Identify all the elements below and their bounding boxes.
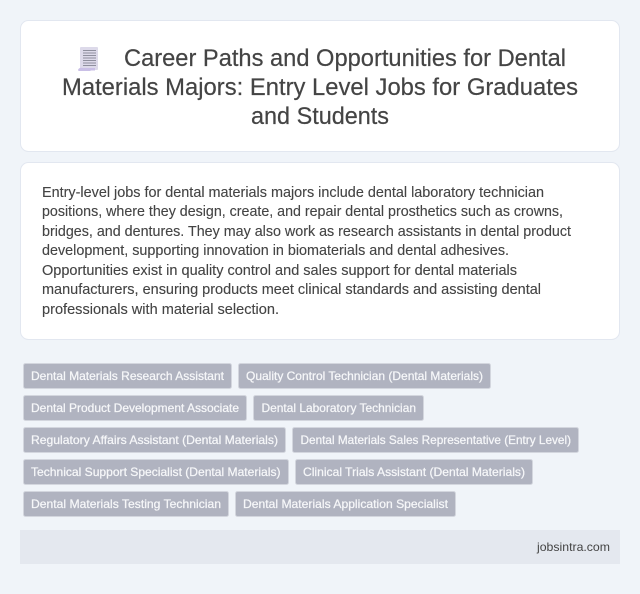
tag: Dental Materials Research Assistant	[24, 364, 232, 388]
tag: Dental Laboratory Technician	[254, 396, 424, 420]
tag: Dental Materials Research Assistant: Dental Materials Research Assistant	[31, 369, 225, 383]
tag: Dental Materials Sales Representative	[292, 428, 578, 452]
tag: Quality Control Technician	[238, 364, 490, 388]
tag: Dental Materials Sales Representative: Dental Materials Sales Representative (Entry Level)	[300, 433, 571, 447]
tag: Technical Support Specialist: Technical Support Specialist (Dental Materials)	[31, 465, 281, 479]
tag: Regulatory Affairs Assistant	[24, 428, 286, 452]
icon: document scroll	[78, 47, 98, 71]
panel: description card	[20, 162, 620, 340]
footer: jobsintra.com	[536, 540, 610, 554]
tag: Clinical Trials Assistant	[296, 460, 532, 484]
text block: description: professionals with material selection.	[42, 302, 279, 318]
tag: Quality Control Technician: Quality Control Technician (Dental Materials)	[246, 369, 483, 383]
tag: Dental Materials Application Specialist: Dental Materials Application Specialist	[243, 497, 449, 511]
text block: description: Opportunities exist in quality control and sales support for dental materials	[42, 263, 517, 279]
tag: Dental Laboratory Technician: Dental Laboratory Technician	[262, 401, 416, 415]
job tags	[24, 364, 578, 516]
text block: description: bridges, and dentures. They may also work as research assistants in dental product	[42, 224, 571, 240]
tag: Dental Product Development Associate: Dental Product Development Associate	[31, 401, 239, 415]
text block: description: development, supporting innovation in biomaterials and dental adhesives.	[42, 243, 509, 259]
text block: description: positions, where they design, create, and repair dental prosthetics such as crowns,	[42, 204, 563, 220]
tag: Dental Product Development Associate	[24, 396, 246, 420]
text block: description: manufacturers, ensuring products meet clinical standards and assisting dental	[42, 282, 541, 298]
footer	[20, 530, 620, 564]
text block: description	[42, 185, 571, 318]
tag: Dental Materials Application Specialist	[236, 492, 456, 516]
tag: Dental Materials Testing Technician: Dental Materials Testing Technician	[31, 497, 221, 511]
text block: description: Entry-level jobs for dental materials majors include dental laboratory technician	[42, 185, 544, 201]
tag: Regulatory Affairs Assistant: Regulatory Affairs Assistant (Dental Materials)	[31, 433, 278, 447]
title	[62, 45, 578, 130]
tag: Dental Materials Testing Technician	[24, 492, 228, 516]
title: Career Paths and Opportunities for Dental	[124, 45, 566, 72]
tag: Technical Support Specialist	[24, 460, 288, 484]
panel: title card	[20, 20, 620, 152]
title: and Students	[251, 103, 389, 130]
title: Materials Majors: Entry Level Jobs for Graduates	[62, 74, 578, 101]
tag: Clinical Trials Assistant: Clinical Trials Assistant (Dental Materials)	[303, 465, 525, 479]
